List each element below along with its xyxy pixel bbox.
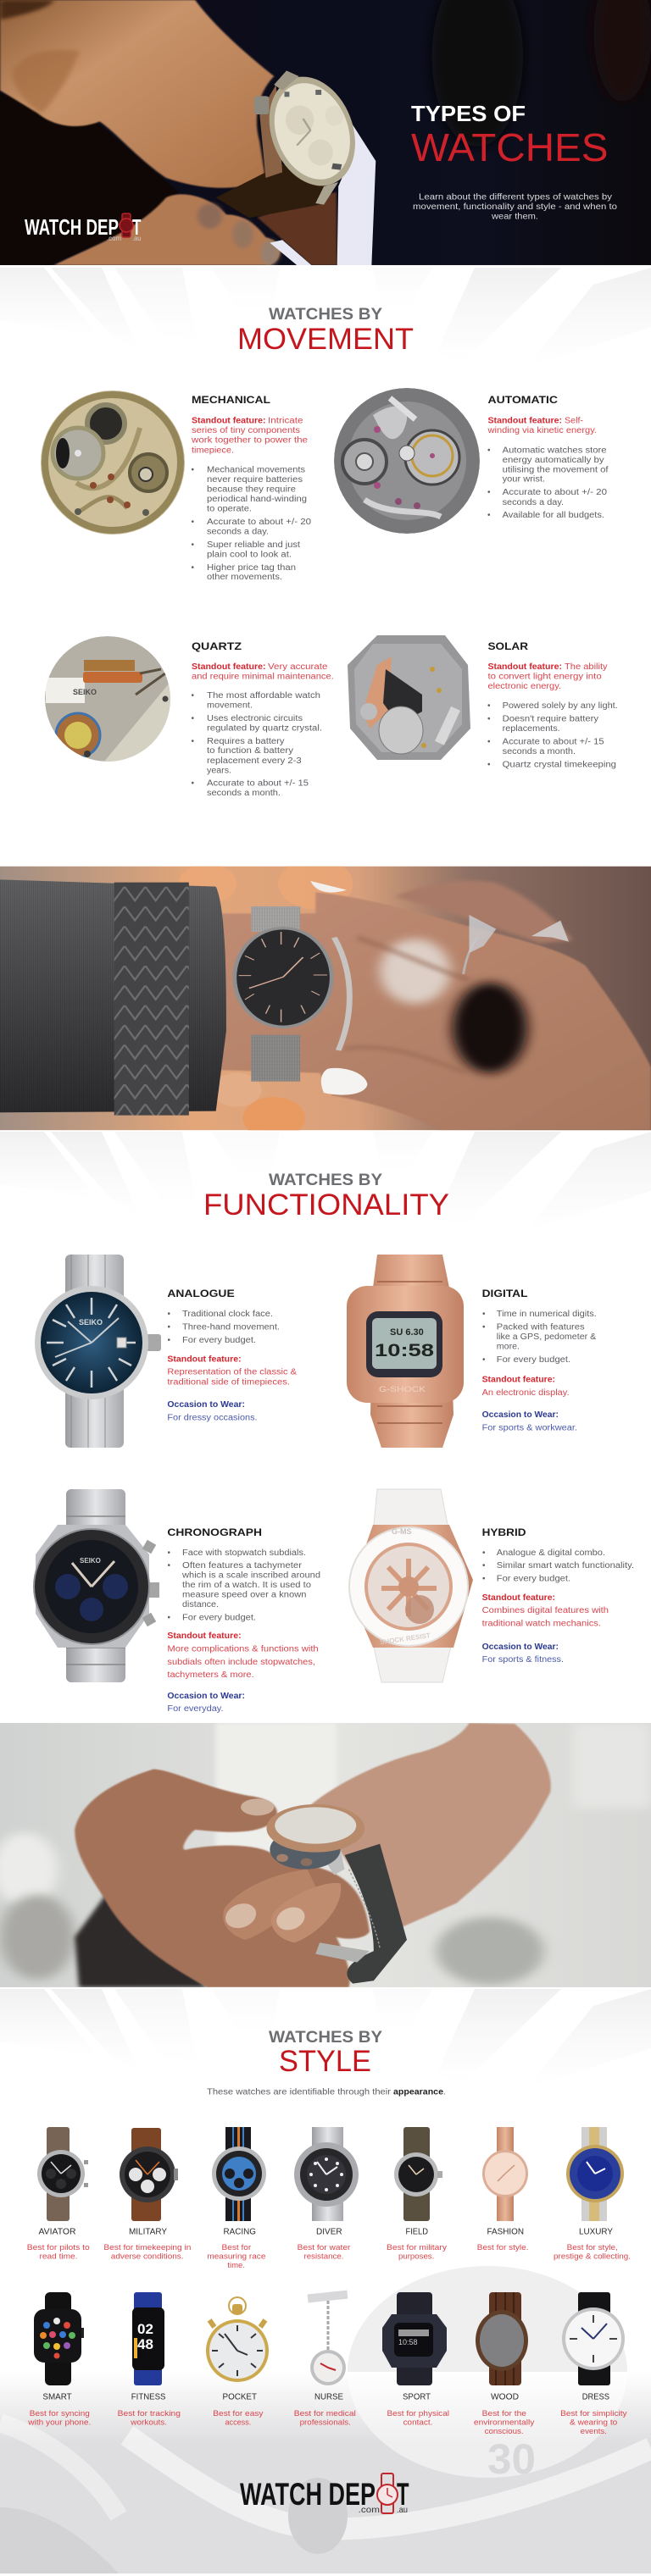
standout feature: Representation of the classic &: [167, 1367, 297, 1377]
bullets: Automatic watches store: [503, 446, 607, 456]
text: analogue: [167, 1288, 297, 1423]
row labels: names and captions, first row: time.: [227, 2261, 245, 2270]
occasion to wear: Occasion to Wear:: [482, 1410, 559, 1420]
row labels: names and captions, first row: Best for military: [387, 2243, 447, 2252]
row labels: names and captions, second row: & wearing to: [570, 2418, 617, 2428]
icon: mechanical movement: [41, 391, 185, 535]
row labels: names and captions, first row: Best for pilots to: [27, 2243, 90, 2252]
standout feature: [487, 417, 597, 435]
row: fitness watch: 48: [137, 2336, 153, 2352]
row: dress watch: [562, 2292, 625, 2385]
name: ANALOGUE: [167, 1288, 235, 1299]
bullets: •: [192, 779, 195, 788]
row labels: names and captions, first row: DIVER: [316, 2226, 342, 2236]
name: DIGITAL: [482, 1288, 527, 1299]
bullets: Available for all budgets.: [503, 511, 604, 520]
bullets: •: [482, 1310, 486, 1319]
row labels: names and captions, first row: read time.: [39, 2252, 78, 2262]
row labels: names and captions, second row: FITNESS: [131, 2392, 165, 2402]
bullets: [168, 1310, 280, 1345]
bullets: utilising the movement of: [503, 466, 609, 474]
bullets: measure speed over a known: [182, 1591, 307, 1599]
row labels: names and captions, first row: prestige & collecting.: [554, 2252, 631, 2262]
heading: watches by functionality: FUNCTIONALITY: [203, 1188, 449, 1222]
standout feature: Self-: [565, 417, 583, 425]
heading: watches by movement: [237, 305, 414, 356]
bullets: Powered solely by any light.: [503, 701, 618, 711]
style intro: .: [443, 2087, 446, 2097]
bullets: which is a scale inscribed around: [181, 1571, 320, 1581]
standout feature: to convert light energy into: [488, 673, 602, 681]
occasion to wear: [482, 1410, 577, 1433]
bullets: For every budget.: [182, 1336, 256, 1345]
bullets: seconds a day.: [503, 498, 564, 507]
row: fitness watch: 02: [137, 2321, 153, 2337]
row labels: names and captions, second row: access.: [225, 2418, 251, 2428]
bullets: your wrist.: [503, 474, 545, 485]
row labels: names and captions, second row: POCKET: [222, 2392, 258, 2402]
bullets: •: [168, 1323, 171, 1332]
footer logo: T: [397, 2477, 409, 2512]
standout feature: tachymeters & more.: [167, 1670, 254, 1680]
standout feature: [482, 1593, 609, 1628]
row: racing watch: [212, 2127, 266, 2221]
footer logo: WATCH DEP: [240, 2477, 376, 2512]
row labels: names and captions, second row: Best for simplicity: [560, 2409, 627, 2418]
standout feature: The ability: [565, 662, 608, 672]
bullets: •: [192, 540, 195, 550]
bullets: •: [192, 518, 195, 527]
bullets: energy automatically by: [503, 456, 604, 465]
row labels: names and captions, second row: SPORT: [403, 2392, 431, 2402]
bullets: •: [487, 701, 491, 711]
row labels: names and captions, second row: Best for the: [482, 2409, 526, 2418]
row: sport watch: 10:58: [398, 2338, 418, 2346]
standout feature: Combines digital features with: [482, 1606, 609, 1615]
row labels: names and captions, first row: resistance.: [303, 2252, 344, 2262]
bullets: •: [482, 1561, 486, 1571]
occasion to wear: Occasion to Wear:: [167, 1692, 245, 1701]
bullets: Doesn't require battery: [503, 715, 598, 723]
hero intro text: Learn about the different types of watches by: [419, 191, 613, 202]
hero title: [411, 102, 609, 169]
standout feature: More complications & functions with: [167, 1645, 319, 1654]
watch: digital: SU 6.30: [390, 1327, 424, 1338]
bullets: seconds a month.: [503, 747, 576, 756]
bullets: •: [192, 714, 195, 723]
occasion to wear: For dressy occasions.: [167, 1413, 258, 1423]
watch: analogue: SEIKO: [79, 1318, 103, 1327]
row: fitness watch: [132, 2292, 164, 2385]
row labels: names and captions, second row: [27, 2392, 627, 2436]
icon: automatic movement: [334, 388, 480, 534]
standout feature: series of tiny components: [192, 426, 300, 435]
bullets: •: [487, 446, 491, 456]
bullets: •: [192, 563, 195, 573]
bullets: For every budget.: [182, 1613, 256, 1623]
watch: hybrid: G-MS: [392, 1527, 412, 1536]
hero logo: .com: [107, 235, 121, 242]
standout feature: electronic energy.: [488, 682, 561, 691]
standout feature: Standout feature:: [167, 1355, 242, 1364]
name: HYBRID: [482, 1526, 526, 1538]
row labels: names and captions, second row: WOOD: [491, 2392, 519, 2402]
bullets: For every budget.: [497, 1574, 570, 1584]
bullets: •: [487, 511, 491, 520]
heading: watches by movement: MOVEMENT: [237, 323, 414, 356]
standout feature: [488, 662, 608, 691]
bullets: [482, 1310, 597, 1365]
standout feature: traditional watch mechanics.: [482, 1620, 601, 1628]
hero logo: .au: [132, 235, 141, 242]
bullets: •: [168, 1336, 171, 1345]
bullets: Packed with features: [497, 1323, 585, 1332]
row labels: names and captions, first row: Best for: [222, 2243, 251, 2252]
bullets: •: [487, 488, 491, 497]
bullets: Accurate to about +/- 20: [207, 518, 311, 527]
row labels: names and captions, second row: Best for syncing: [30, 2409, 90, 2418]
bullets: Often features a tachymeter: [182, 1561, 303, 1571]
row labels: names and captions, second row: DRESS: [582, 2392, 609, 2402]
hero intro text: movement, functionality and style - and when to: [413, 202, 617, 212]
row labels: names and captions, second row: Best for easy: [213, 2409, 264, 2418]
row: luxury watch: [566, 2127, 624, 2221]
bullets: Mechanical movements: [207, 466, 305, 474]
bullets: Requires a battery: [207, 737, 285, 746]
row labels: names and captions, first row: RACING: [224, 2226, 256, 2236]
occasion to wear: For sports & workwear.: [482, 1423, 577, 1433]
standout feature: [482, 1376, 570, 1398]
row labels: names and captions, first row: Best for style,: [567, 2243, 618, 2252]
bullets: •: [168, 1613, 171, 1623]
bullets: •: [168, 1310, 171, 1319]
row labels: names and captions, second row: NURSE: [314, 2392, 343, 2402]
bullets: Quartz crystal timekeeping: [503, 761, 616, 769]
occasion to wear: Occasion to Wear:: [167, 1400, 245, 1410]
icon: quartz movement: [45, 636, 174, 767]
standout feature: Standout feature:: [482, 1376, 555, 1384]
occasion to wear: For everyday.: [167, 1704, 224, 1714]
bullets: Super reliable and just: [207, 540, 300, 550]
bullets: never require batteries: [207, 475, 303, 485]
bullets: distance.: [182, 1600, 219, 1609]
hero title: TYPES OF: [411, 102, 526, 126]
bullets: seconds a month.: [207, 789, 281, 798]
heading: watches by functionality: [203, 1171, 449, 1222]
bullets: [192, 691, 322, 798]
decorative rays: functionality: [0, 1132, 651, 1232]
standout feature: Standout feature:: [167, 1631, 242, 1641]
standout feature: Standout feature:: [482, 1593, 555, 1603]
heading: watches by style: [269, 2028, 382, 2078]
bullets: the rim of a watch. It is used to: [182, 1581, 311, 1590]
row labels: names and captions, second row: workouts.: [130, 2418, 167, 2428]
bullets: seconds a day.: [207, 527, 269, 537]
decorative rays: style: [0, 1989, 651, 2089]
standout feature: Intricate: [268, 417, 303, 425]
heading: watches by functionality: WATCHES BY: [269, 1171, 382, 1189]
bullets: Accurate to about +/- 15: [207, 779, 309, 788]
bullets: [168, 1548, 320, 1623]
bullets: For every budget.: [497, 1355, 570, 1365]
text: solar: [487, 640, 618, 769]
bullets: [487, 446, 609, 520]
standout feature: Very accurate: [268, 662, 328, 672]
row labels: names and captions, second row: Best for medical: [294, 2409, 356, 2418]
footer logo: .au: [397, 2505, 408, 2515]
watch: chronograph: [34, 1489, 159, 1682]
bullets: •: [487, 737, 491, 747]
row labels: names and captions, first row: Best for style.: [477, 2243, 529, 2252]
row labels: names and captions, second row: with your phone.: [27, 2418, 91, 2428]
text: hybrid: [482, 1526, 634, 1665]
bullets: to operate.: [207, 505, 252, 513]
bullets: Time in numerical digits.: [497, 1310, 597, 1319]
standout feature: [167, 1631, 319, 1680]
bullets: •: [482, 1548, 486, 1558]
standout feature: winding via kinetic energy.: [487, 426, 597, 435]
hero intro text: [413, 191, 617, 222]
occasion to wear: [167, 1692, 245, 1714]
bullets: •: [487, 761, 491, 769]
name: QUARTZ: [192, 640, 242, 652]
bullets: Uses electronic circuits: [207, 714, 303, 723]
row: diver watch: [294, 2127, 359, 2221]
row labels: names and captions, first row: LUXURY: [579, 2226, 613, 2236]
standout feature: work together to power the: [191, 435, 308, 446]
bullets: replacement every 2-3: [207, 756, 302, 766]
text: chronograph: [167, 1526, 320, 1714]
bullets: Higher price tag than: [207, 563, 296, 573]
occasion to wear: [482, 1643, 564, 1665]
standout feature: subdials often include stopwatches,: [167, 1658, 315, 1667]
row: wood watch: [476, 2292, 528, 2385]
bullets: •: [192, 466, 195, 474]
row labels: names and captions, first row: AVIATOR: [39, 2226, 76, 2236]
name: SOLAR: [488, 640, 528, 652]
bullets: Face with stopwatch subdials.: [182, 1548, 306, 1558]
style intro: These watches are identifiable through their: [207, 2087, 392, 2097]
row labels: names and captions, second row: conscious.: [485, 2427, 524, 2436]
bullets: other movements.: [207, 573, 282, 582]
photo: woman's wrist with black watch: [0, 858, 651, 1139]
row: fashion watch: [482, 2127, 528, 2221]
standout feature: [191, 417, 308, 456]
bullets: Similar smart watch functionality.: [497, 1561, 634, 1571]
heading: watches by style: WATCHES BY: [269, 2028, 382, 2047]
bullets: years.: [207, 766, 231, 776]
standout feature: Standout feature:: [192, 662, 266, 672]
footer background: [0, 2266, 651, 2573]
bullets: •: [192, 737, 195, 746]
row labels: names and captions, first row: FIELD: [405, 2226, 428, 2236]
watch: digital: G-SHOCK: [379, 1385, 426, 1393]
footer background: 30: [487, 2435, 536, 2483]
text: mechanical: [191, 394, 311, 582]
bullets: plain cool to look at.: [207, 551, 292, 559]
bullets: •: [482, 1323, 486, 1332]
bullets: replacements.: [503, 724, 560, 734]
standout feature: timepiece.: [192, 446, 234, 456]
row labels: names and captions, second row: contact.: [403, 2418, 432, 2428]
name: MECHANICAL: [192, 394, 270, 406]
bullets: movement.: [207, 701, 253, 710]
row labels: names and captions, first row: MILITARY: [129, 2226, 167, 2236]
standout feature: Standout feature:: [488, 662, 562, 672]
row labels: names and captions, first row: [27, 2226, 631, 2270]
row labels: names and captions, second row: events.: [581, 2427, 607, 2436]
standout feature: and require minimal maintenance.: [192, 673, 334, 681]
row: smart watch: [34, 2292, 84, 2385]
row: military watch: [120, 2128, 178, 2221]
watch: digital: 10:58: [375, 1341, 434, 1360]
row labels: names and captions, first row: adverse conditions.: [111, 2252, 183, 2262]
bullets: [482, 1548, 634, 1584]
photo: man adjusting watch: [0, 1723, 651, 1987]
standout feature: Standout feature:: [192, 417, 266, 425]
text: quartz: [192, 640, 334, 798]
decorative rays: movement: [0, 268, 651, 368]
row labels: names and captions, first row: Best for water: [298, 2243, 350, 2252]
text: automatic: [487, 394, 609, 520]
bullets: Accurate to about +/- 15: [503, 737, 604, 747]
watch: analogue: [35, 1255, 161, 1448]
row labels: names and captions, second row: Best for tracking: [118, 2409, 181, 2418]
bullets: •: [168, 1561, 171, 1571]
bullets: more.: [497, 1342, 520, 1352]
row labels: names and captions, second row: Best for physical: [387, 2409, 449, 2418]
occasion to wear: [167, 1400, 258, 1423]
watch: hybrid: [349, 1489, 473, 1682]
bullets: because they require: [207, 485, 296, 495]
hero intro text: wear them.: [491, 212, 538, 222]
watch: chronograph: SEIKO: [80, 1557, 101, 1565]
row: field watch: [394, 2127, 442, 2221]
row: sport watch: [382, 2292, 447, 2385]
standout feature: [167, 1355, 297, 1388]
bullets: to function & battery: [207, 746, 293, 756]
text: digital: [482, 1288, 597, 1433]
hero title: WATCHES: [411, 125, 609, 169]
bullets: The most affordable watch: [207, 691, 320, 701]
standout feature: [192, 662, 334, 681]
row labels: names and captions, second row: professionals.: [300, 2418, 351, 2428]
row labels: names and captions, first row: measuring race: [207, 2252, 265, 2262]
watch: digital: [347, 1255, 464, 1448]
row labels: names and captions, first row: Best for timekeeping in: [103, 2243, 191, 2252]
bullets: Analogue & digital combo.: [497, 1548, 605, 1558]
hero logo: T: [132, 214, 142, 240]
bullets: [192, 466, 311, 582]
icon: quartz movement: SEIKO: [73, 688, 97, 696]
name: CHRONOGRAPH: [167, 1526, 262, 1538]
bullets: [487, 701, 618, 769]
footer logo: .com: [359, 2505, 380, 2515]
bullets: •: [487, 715, 491, 723]
row: pocket watch: [206, 2297, 269, 2382]
watch: hybrid: SHOCK RESIST: [380, 1631, 431, 1646]
row labels: names and captions, second row: environmentally: [474, 2418, 535, 2428]
row labels: names and captions, first row: FASHION: [487, 2226, 524, 2236]
standout feature: traditional side of timepieces.: [167, 1377, 290, 1388]
bullets: periodical hand-winding: [207, 495, 307, 504]
row labels: names and captions, second row: SMART: [42, 2392, 72, 2402]
occasion to wear: For sports & fitness.: [482, 1655, 564, 1665]
row: nurse watch: [308, 2291, 348, 2385]
standout feature: An electronic display.: [482, 1388, 570, 1398]
occasion to wear: Occasion to Wear:: [482, 1643, 559, 1652]
bullets: •: [192, 691, 195, 701]
bullets: regulated by quartz crystal.: [207, 723, 322, 734]
hero photo: wrist with watch: [0, 0, 651, 265]
bullets: Accurate to about +/- 20: [503, 488, 608, 497]
row: aviator watch: [37, 2127, 88, 2221]
bullets: Traditional clock face.: [182, 1310, 273, 1319]
bullets: Three-hand movement.: [182, 1323, 280, 1332]
heading: watches by style: STYLE: [279, 2045, 371, 2078]
style intro: appearance: [393, 2087, 443, 2097]
bullets: •: [482, 1355, 486, 1365]
style intro: [207, 2087, 446, 2097]
name: AUTOMATIC: [488, 394, 558, 406]
bullets: •: [482, 1574, 486, 1584]
icon: solar movement: [348, 635, 470, 760]
hero logo: WATCH DEP: [25, 214, 119, 240]
row labels: names and captions, first row: purposes.: [398, 2252, 434, 2262]
bullets: like a GPS, pedometer &: [497, 1332, 597, 1342]
heading: watches by movement: WATCHES BY: [269, 305, 382, 324]
bullets: •: [168, 1548, 171, 1558]
standout feature: Standout feature:: [488, 417, 562, 425]
